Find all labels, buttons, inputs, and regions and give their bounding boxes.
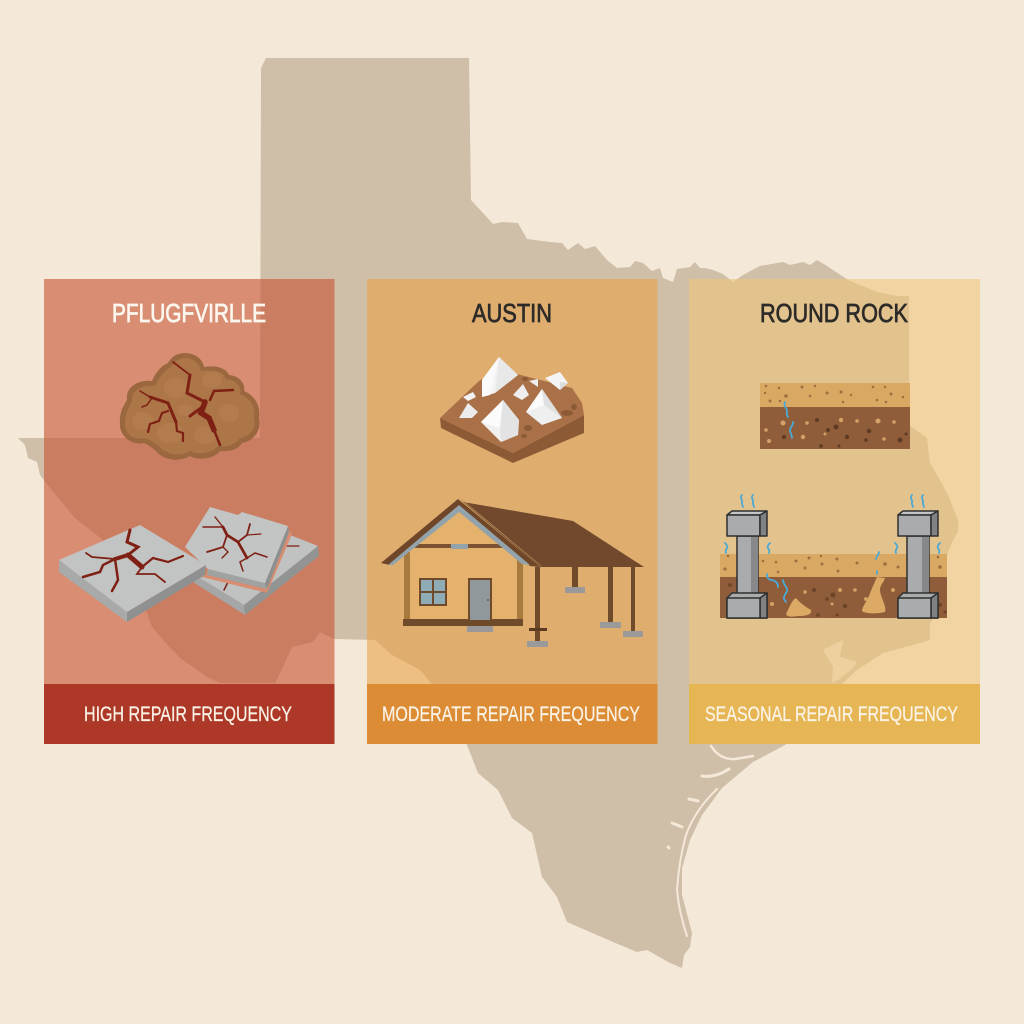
house walls <box>407 512 520 620</box>
window <box>419 578 447 606</box>
water seepage <box>767 552 879 602</box>
banner: moderate repair frequency <box>367 684 658 744</box>
panel: Austin <box>367 279 658 744</box>
icon: house on pier foundations <box>381 499 644 647</box>
front slab <box>59 525 206 622</box>
heading: Round Rock: ROUND ROCK <box>760 298 909 328</box>
icon: piers with shifting soil and water erosion <box>720 495 947 618</box>
moisture squiggles <box>725 495 940 553</box>
floor beam <box>403 619 523 626</box>
coastal lagoons and bays <box>668 640 857 936</box>
panel: Round Rock <box>689 279 980 744</box>
heading: Pflugerville: PFLUGFVIRLLE <box>112 298 266 328</box>
banner: seasonal repair frequency <box>689 684 980 744</box>
main roof <box>463 502 644 567</box>
banner: high repair frequency <box>44 684 334 744</box>
icon: cracked clay clod <box>120 353 260 460</box>
middle slab <box>185 507 289 589</box>
left pier <box>727 511 767 618</box>
heading: Austin: AUSTIN <box>472 298 552 328</box>
banner: moderate repair frequency: MODERATE REPAIR FREQUENCY <box>382 703 640 726</box>
icon: soil layers cross-section with water <box>760 383 910 449</box>
eroded sand pockets <box>786 598 811 617</box>
right pier <box>898 511 938 618</box>
salmon gap <box>185 530 292 593</box>
panel: Pflugerville <box>44 279 334 744</box>
back slab <box>193 535 319 615</box>
icon: cracked concrete slabs <box>59 507 319 622</box>
banner: high repair frequency: HIGH REPAIR FREQUENCY <box>84 703 292 726</box>
icon: soil block with white limestone crystals <box>440 357 584 463</box>
gable rafters <box>381 499 540 567</box>
posts and footings <box>527 567 643 647</box>
door <box>468 578 492 620</box>
